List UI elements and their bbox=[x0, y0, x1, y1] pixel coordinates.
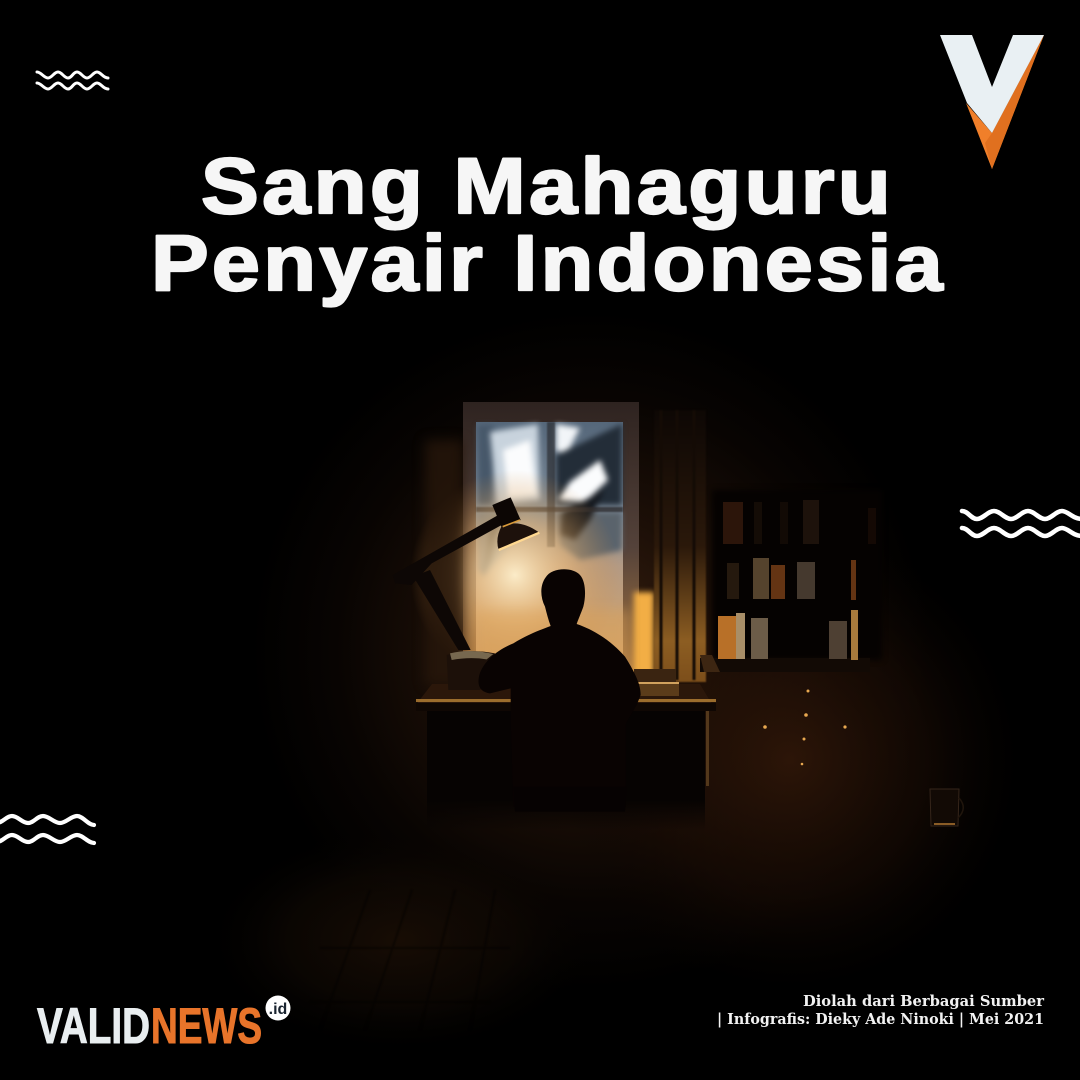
lower arm bbox=[413, 570, 471, 650]
decorative wave: right bbox=[962, 511, 1080, 536]
V darker fold bbox=[985, 35, 1044, 169]
lamp base bbox=[447, 651, 495, 690]
desk lamp bbox=[393, 497, 539, 690]
floor glow bbox=[210, 830, 590, 1050]
window frame bbox=[463, 402, 639, 692]
glow below window bbox=[475, 610, 630, 685]
badge circle bbox=[266, 996, 290, 1020]
credit line 1: Diolah dari Berbagai Sumber bbox=[803, 993, 1044, 1010]
wordmark valid: VALID bbox=[37, 998, 150, 1054]
moonlit foliage bbox=[478, 424, 622, 578]
lamp shade bbox=[497, 523, 539, 550]
middle row books bbox=[727, 558, 856, 600]
shelf body bbox=[712, 490, 882, 660]
title line 2: Penyair Indonesia bbox=[151, 218, 946, 307]
window crossbar bbox=[476, 507, 623, 512]
source credit bbox=[717, 993, 1044, 1028]
upper arm bbox=[393, 515, 502, 585]
floor planks bbox=[310, 890, 510, 1030]
title line 1: Sang Mahaguru bbox=[201, 141, 894, 230]
lamp head bbox=[492, 497, 521, 527]
V white face bbox=[940, 35, 1044, 133]
top row books bbox=[723, 500, 876, 544]
badge text: .id bbox=[269, 1001, 287, 1018]
lamp light bbox=[410, 470, 620, 680]
room glow bbox=[250, 310, 930, 990]
chair gap highlights bbox=[519, 728, 526, 766]
decorative wave: top left bbox=[37, 72, 108, 89]
cabinet knobs bbox=[763, 690, 847, 765]
glass cup bbox=[930, 789, 963, 826]
chair base bbox=[513, 787, 627, 812]
window mullion bbox=[547, 422, 555, 547]
title bbox=[151, 141, 946, 307]
left wall shade bbox=[425, 440, 463, 685]
desk bbox=[416, 669, 716, 830]
bookshelf bbox=[700, 490, 882, 765]
window bbox=[463, 402, 639, 692]
silhouette of poet bbox=[479, 569, 641, 812]
bottom row books bbox=[718, 610, 858, 660]
stacked books on desk bbox=[634, 669, 676, 682]
window glass bbox=[476, 422, 623, 662]
lamp rim glow bbox=[499, 533, 539, 550]
V orange base bbox=[966, 35, 1044, 169]
decorative wave: bottom left bbox=[0, 816, 94, 843]
brand mark: V logo bbox=[940, 35, 1044, 169]
wordmark news: NEWS bbox=[151, 998, 262, 1054]
curtain panel right bbox=[654, 410, 706, 682]
desk under-shadow bbox=[427, 710, 705, 830]
photo: poet at desk bbox=[210, 310, 1020, 1050]
desk top bbox=[416, 684, 716, 711]
lit wall strip bbox=[634, 592, 654, 680]
desk leg highlight bbox=[706, 711, 709, 786]
cabinet side glow bbox=[560, 530, 1020, 990]
credit line 2: | Infografis: Dieky Ade Ninoki | Mei 2021 bbox=[717, 1011, 1044, 1028]
logo: Validnews.id bbox=[37, 996, 290, 1054]
